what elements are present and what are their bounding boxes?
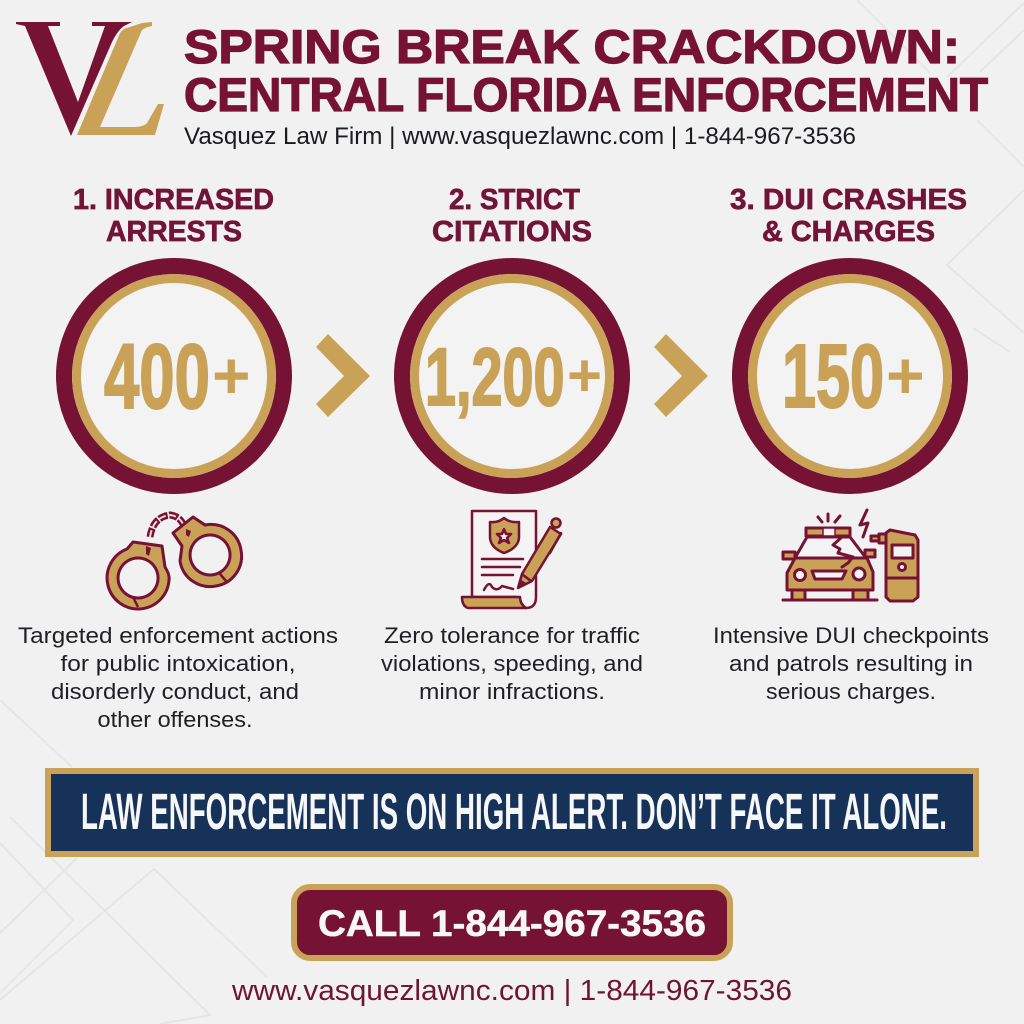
icon: citation document and pen	[462, 511, 561, 608]
heading: increased arrests: ARRESTS	[106, 216, 242, 248]
heading: strict citations: 2. STRICT	[449, 184, 580, 216]
panel: DUI crashes and charges	[713, 184, 989, 704]
heading: increased arrests	[73, 184, 274, 248]
stat circle: 400+: 400	[104, 324, 210, 428]
logo: VL monogram	[16, 22, 164, 136]
heading: strict citations	[432, 184, 592, 248]
stat circle: 150+: 150	[782, 326, 884, 427]
title: CENTRAL FLORIDA ENFORCEMENT	[184, 68, 988, 121]
call to action button: CALL 1-844-967-3536	[318, 903, 706, 944]
stat circle: 400+	[64, 266, 284, 486]
description: DUI: Intensive DUI checkpoints	[713, 623, 989, 648]
heading: strict citations: CITATIONS	[432, 216, 592, 248]
heading: DUI crashes	[730, 184, 967, 248]
stat circle: 400+: +	[212, 338, 251, 412]
description: citations: violations, speeding, and	[381, 651, 643, 676]
call to action button	[294, 887, 730, 958]
description: arrests: for public intoxication,	[60, 651, 296, 676]
description: arrests: Targeted enforcement actions	[18, 623, 338, 648]
stat circle: 150+: +	[886, 338, 925, 412]
panel: increased arrests	[18, 184, 338, 732]
stat circle: 150+	[740, 266, 960, 486]
icon: crashed police car and breathalyzer	[783, 510, 918, 601]
stat circle: 1,200+	[402, 266, 622, 486]
heading: increased arrests: 1. INCREASED	[73, 184, 274, 216]
description: DUI: and patrols resulting in	[729, 651, 973, 676]
description: citations: minor infractions.	[419, 679, 605, 704]
title	[184, 20, 988, 121]
panel: strict citations	[381, 184, 643, 704]
title: SPRING BREAK CRACKDOWN:	[184, 20, 960, 73]
stat circle: 1,200+: 1,200	[425, 331, 565, 423]
heading: DUI crashes: & CHARGES	[762, 216, 935, 248]
banner: high alert message	[48, 771, 976, 854]
description: arrests	[18, 623, 338, 732]
description: citations	[381, 623, 643, 704]
description: arrests: disorderly conduct, and	[51, 679, 299, 704]
description: arrests: other offenses.	[98, 707, 253, 732]
icon: handcuffs	[107, 515, 242, 609]
description: DUI	[713, 623, 989, 704]
stat circle: 1,200+: +	[567, 342, 602, 409]
footer: website and phone: www.vasquezlawnc.com | 1-844-967-3536	[231, 975, 792, 1007]
description: citations: Zero tolerance for traffic	[384, 623, 640, 648]
arrow: step two to three	[654, 334, 708, 417]
heading: DUI crashes: 3. DUI CRASHES	[730, 184, 967, 216]
description: DUI: serious charges.	[766, 679, 936, 704]
subtitle: firm contact line: Vasquez Law Firm | www.vasquezlawnc.com | 1-844-967-3536	[184, 123, 856, 150]
arrow: step one to two	[316, 334, 370, 417]
